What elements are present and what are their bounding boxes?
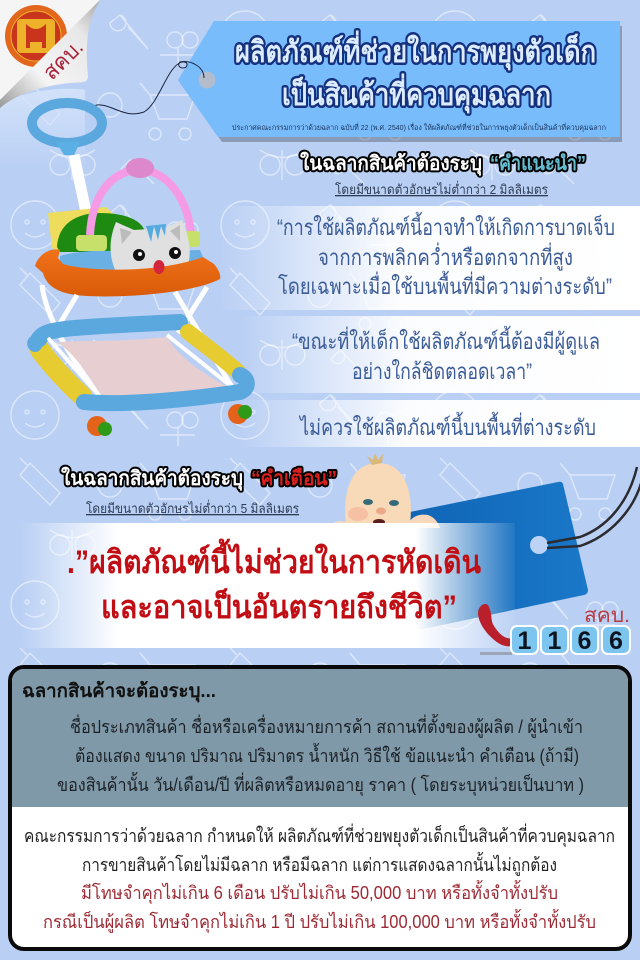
curl label: สคบ. [38, 34, 88, 85]
warning band [20, 523, 515, 648]
tag strings [547, 467, 640, 548]
subheading: minimum 2 mm: โดยมีขนาดตัวอักษรไม่ต่ำกว่า 2 มิลลิเมตร [335, 181, 548, 197]
digits [511, 626, 630, 654]
penalties [43, 880, 596, 933]
baby peeking [330, 453, 440, 528]
hotline [478, 604, 630, 655]
toy clips [76, 231, 200, 251]
baby hands [330, 515, 440, 528]
tag hole [530, 536, 548, 554]
panel heading: ฉลากสินค้าจะต้องระบุ... [22, 680, 216, 703]
x-frame legs [42, 285, 232, 400]
tray inner [60, 250, 205, 272]
heading: instructions: ในฉลากสินค้าต้องระบุ [300, 151, 482, 176]
frame inner diagonals [48, 335, 232, 400]
mat [57, 337, 230, 398]
tag hole [198, 72, 216, 88]
required details: ต้องแสดง ขนาด ปริมาณ ปริมาตร น้ำหนัก วิธีใช้ ข้อแนะนำ คำเตือน (ถ้ามี) [75, 743, 579, 766]
icon: red telephone [478, 604, 512, 655]
required details: ชื่อประเภทสินค้า ชื่อหรือเครื่องหมายการค้า สถานที่ตั้งของผู้ผลิต / ผู้นำเข้า [70, 714, 583, 738]
wheels [87, 404, 252, 436]
warning text: .”ผลิตภัณฑ์นี้ไม่ช่วยในการหัดเดิน [67, 538, 481, 580]
baby walker illustration [32, 103, 252, 436]
warning text [67, 538, 481, 625]
heading: instructions: “คำแนะนำ” [490, 153, 586, 175]
heading: warning: ในฉลากสินค้าต้องระบุ [61, 466, 243, 491]
subheading: minimum 5 mm: โดยมีขนาดตัวอักษรไม่ต่ำกว่า 5 มิลลิเมตร [86, 500, 299, 516]
page curl corner with seal [0, 0, 100, 108]
cat nose [154, 260, 164, 274]
heading: warning: “คำเตือน” [251, 467, 337, 490]
warning text: และอาจเป็นอันตรายถึงชีวิต” [101, 587, 457, 625]
green seat [57, 213, 145, 252]
committee rule: การขายสินค้าโดยไม่มีฉลาก หรือมีฉลาก แต่การแสดงฉลากนั้นไม่ถูกต้อง [82, 852, 557, 876]
announcement line: ประกาศคณะกรรมการว่าด้วยฉลาก ฉบับที่ 22 (พ.ศ. 2540) เรื่อง ให้ผลิตภัณฑ์ที่ช่วยในการพยุงตัวเด็กเป็นสินค้าที่ควบคุมฉลาก [232, 122, 606, 132]
blue price tag [390, 467, 640, 636]
base back [38, 322, 180, 340]
pole [74, 155, 86, 212]
committee rule [24, 823, 615, 876]
icon: seal [5, 5, 67, 67]
hotline label: สคบ. [584, 605, 630, 627]
heading: instructions [300, 151, 586, 176]
instruction text [277, 212, 615, 440]
arch knob [126, 158, 154, 178]
lighter wash under the curl [0, 89, 85, 170]
penalties: มีโทษจำคุกไม่เกิน 6 เดือน ปรับไม่เกิน 50,000 บาท หรือทั้งจำทั้งปรับ [81, 880, 558, 904]
hotline: 6 [609, 627, 623, 655]
pink arch [90, 170, 191, 235]
header tag [178, 21, 622, 142]
required details [57, 714, 584, 796]
required details: ของสินค้านั้น วัน/เดือน/ปี ที่ผลิตหรือหมดอายุ ราคา ( โดยระบุหน่วยเป็นบาท ) [57, 772, 584, 796]
hotline: 1 [518, 627, 532, 655]
seat back [48, 207, 125, 252]
cat toy [111, 220, 190, 272]
instruction text: จากการพลิกคว่ำหรือตกจากที่สูง [318, 242, 573, 271]
hotline: 1 [548, 627, 562, 655]
orange tray [35, 249, 220, 296]
hotline: 6 [578, 627, 591, 655]
string from walker to tag [90, 62, 204, 114]
heading: warning [61, 466, 337, 491]
label requirements panel [10, 667, 630, 949]
instruction text: อย่างใกล้ชิดตลอดเวลา” [352, 359, 532, 384]
base sides [188, 332, 238, 372]
title [235, 30, 596, 114]
title: เป็นสินค้าที่ควบคุมฉลาก [282, 73, 551, 114]
penalties: กรณีเป็นผู้ผลิต โทษจำคุกไม่เกิน 1 ปี ปรับไม่เกิน 100,000 บาท หรือทั้งจำทั้งปรับ [43, 909, 596, 933]
base front [84, 375, 247, 403]
grey section [12, 669, 628, 807]
handle ring [32, 103, 102, 155]
white instruction bands [220, 206, 640, 447]
